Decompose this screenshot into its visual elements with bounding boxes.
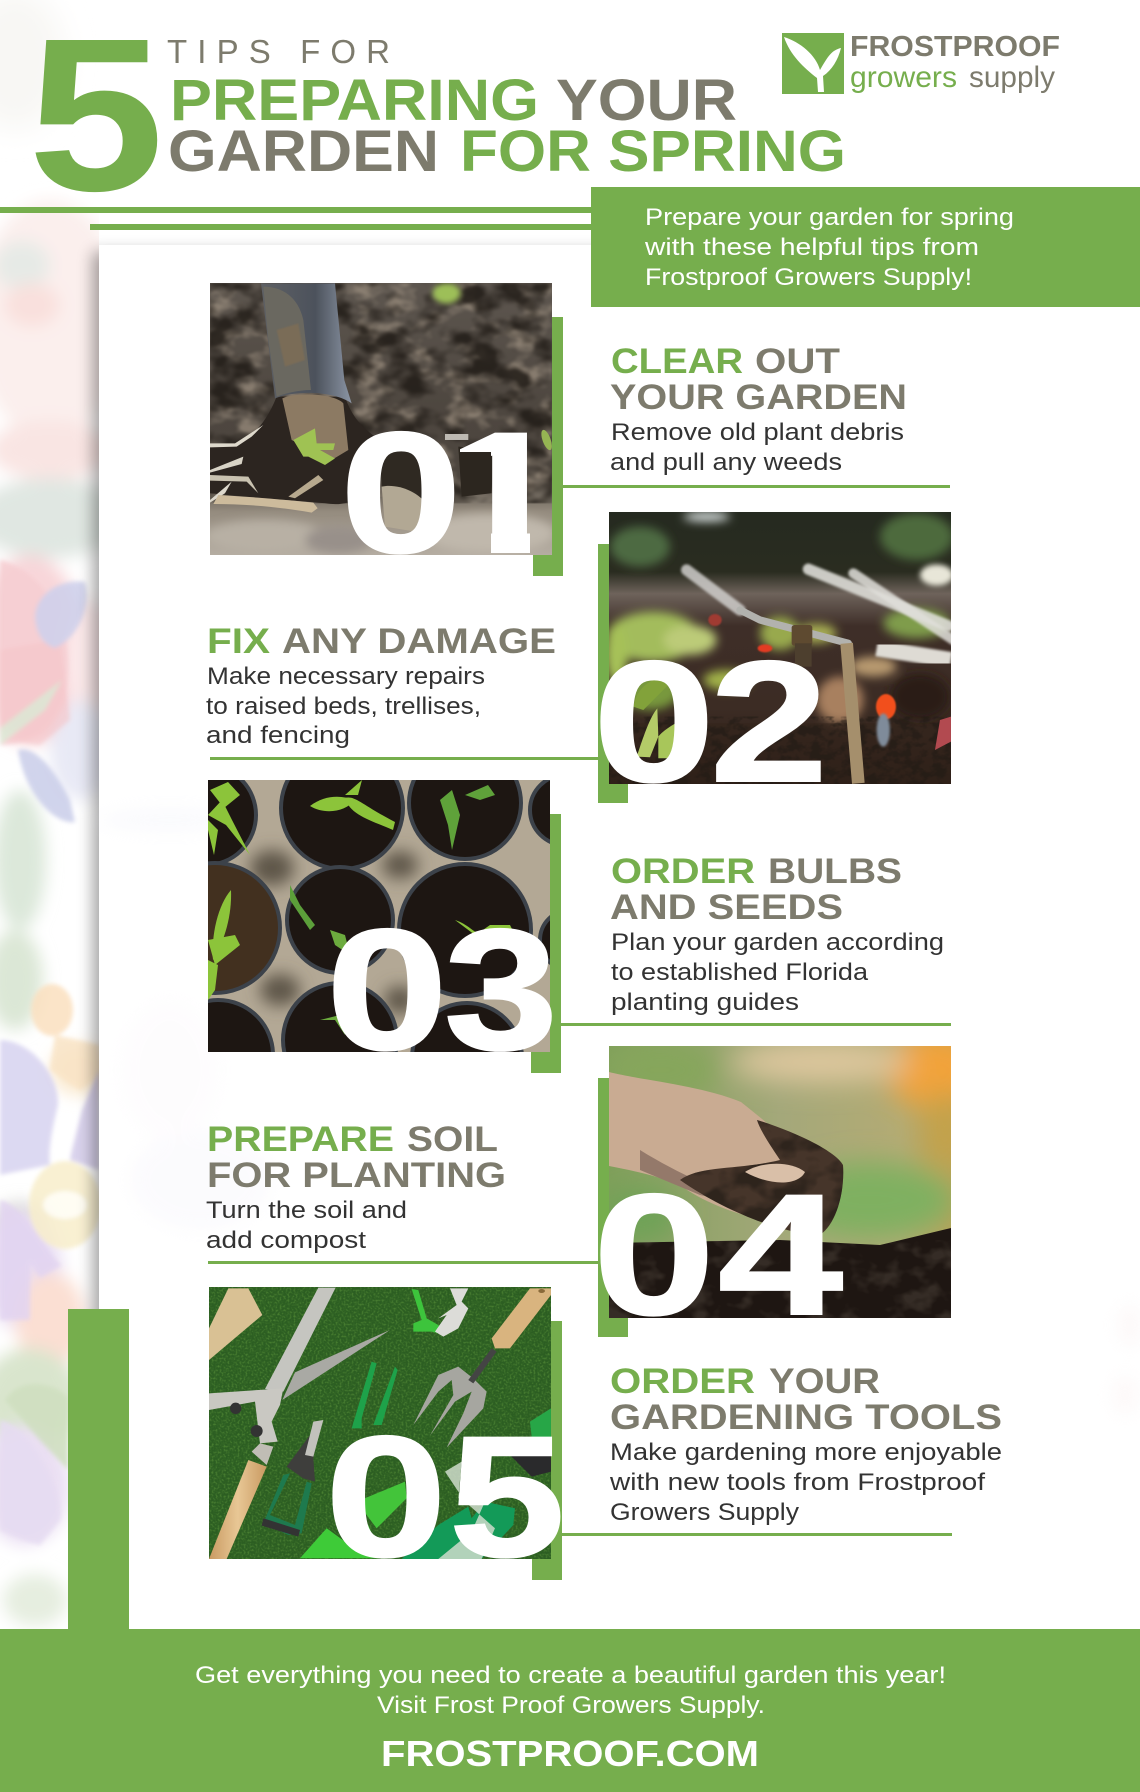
heading: ANY DAMAGE <box>282 622 556 661</box>
description: with new tools from Frostproof <box>609 1469 985 1496</box>
green corner bar <box>531 814 561 1073</box>
heading <box>207 622 556 661</box>
title: FOR SPRING <box>460 119 846 184</box>
heading: AND SEEDS <box>610 888 843 927</box>
connector line <box>561 1023 951 1026</box>
description: Growers Supply <box>610 1499 799 1526</box>
photo: seedlings in pots <box>208 780 550 1052</box>
photo: gardening tools on grass <box>209 1287 551 1559</box>
tip 2: fix any damage <box>206 512 953 818</box>
description: add compost <box>206 1227 366 1254</box>
white content panel <box>93 245 1140 1629</box>
number 01: 1 <box>439 397 569 589</box>
number 05 <box>332 1434 560 1559</box>
photo: hand holding soil <box>609 1046 951 1318</box>
heading: GARDENING TOOLS <box>610 1398 1002 1437</box>
connector line <box>562 1533 952 1536</box>
photo: drip irrigation in raised bed <box>605 512 953 784</box>
description: Make necessary repairs <box>207 663 485 690</box>
description <box>206 663 485 749</box>
title: YOUR <box>556 68 737 133</box>
connector line <box>563 485 950 488</box>
number 05: 0 <box>325 1401 447 1593</box>
heading <box>207 1120 506 1195</box>
logo: Frostproof Growers Supply: growers <box>850 61 957 94</box>
intro callout: Frostproof Growers Supply! <box>645 264 972 291</box>
green corner bar <box>598 544 628 803</box>
number 02: 2 <box>710 626 828 818</box>
intro callout: with these helpful tips from <box>644 234 979 261</box>
heading: BULBS <box>768 852 902 891</box>
heading: SOIL <box>407 1120 498 1159</box>
heading: OUT <box>755 342 840 381</box>
description: Turn the soil and <box>206 1197 407 1224</box>
description: planting guides <box>611 989 799 1016</box>
heading: FOR PLANTING <box>207 1156 506 1195</box>
intro callout: Prepare your garden for spring <box>645 204 1014 231</box>
number 05: 5 <box>449 1401 565 1593</box>
description: Plan your garden according <box>611 929 944 956</box>
heading <box>610 852 902 927</box>
green corner bar <box>598 1078 628 1337</box>
photo: shovel in soil <box>205 283 555 555</box>
footer band <box>0 1629 1140 1792</box>
number 02 <box>600 660 821 784</box>
connector line <box>208 1261 598 1264</box>
connector line <box>210 757 598 760</box>
green corner bar <box>533 317 563 576</box>
footer band: Visit Frost Proof Growers Supply. <box>377 1692 765 1719</box>
heading: FIX <box>207 622 271 661</box>
description: Make gardening more enjoyable <box>610 1439 1002 1466</box>
tip 5: order your gardening tools <box>209 1287 1002 1593</box>
description <box>206 1197 407 1254</box>
header rule lines <box>0 207 591 230</box>
description: and fencing <box>206 722 350 749</box>
green corner bar <box>532 1321 562 1580</box>
heading: YOUR <box>769 1362 880 1401</box>
tip 3: order bulbs and seeds <box>208 780 951 1073</box>
background: watercolor floral wash <box>0 2 99 1629</box>
left green accent bar <box>68 1309 129 1629</box>
intro callout <box>591 187 1140 307</box>
tip 4: prepare soil for planting <box>206 1046 951 1337</box>
heading: ORDER <box>610 1362 755 1401</box>
number 02: 0 <box>593 626 715 818</box>
heading: CLEAR <box>611 342 743 381</box>
number 04 <box>600 1192 844 1317</box>
description <box>610 419 904 476</box>
description: and pull any weeds <box>610 449 842 476</box>
logo: Frostproof Growers Supply: supply <box>969 61 1055 94</box>
heading <box>610 1362 1002 1437</box>
logo: Frostproof Growers Supply: FROSTPROOF <box>850 31 1060 63</box>
footer band: FROSTPROOF.COM <box>381 1733 759 1774</box>
number 03: 3 <box>444 894 558 1086</box>
number 03 <box>333 928 552 1052</box>
footer band: Get everything you need to create a beautiful garden this year! <box>195 1662 946 1689</box>
description <box>611 929 944 1016</box>
number 03: 0 <box>326 894 448 1086</box>
heading: ORDER <box>611 852 755 891</box>
title: TIPS FOR <box>167 33 390 70</box>
number 04: 4 <box>718 1159 843 1351</box>
title: GARDEN <box>168 119 439 184</box>
heading: PREPARE <box>207 1120 394 1159</box>
description: to established Florida <box>611 959 869 986</box>
tip 1: clear out your garden <box>205 283 950 589</box>
description: to raised beds, trellises, <box>206 693 481 720</box>
number 04: 0 <box>593 1159 715 1351</box>
big number 5: 5 <box>28 0 164 237</box>
heading: YOUR GARDEN <box>610 378 907 417</box>
title: PREPARING <box>170 68 539 133</box>
number 01 <box>347 430 530 555</box>
heading <box>610 342 907 417</box>
title <box>167 33 846 184</box>
description <box>609 1439 1002 1526</box>
description: Remove old plant debris <box>611 419 904 446</box>
number 01: 0 <box>340 397 462 589</box>
logo: Frostproof Growers Supply <box>782 31 1060 94</box>
